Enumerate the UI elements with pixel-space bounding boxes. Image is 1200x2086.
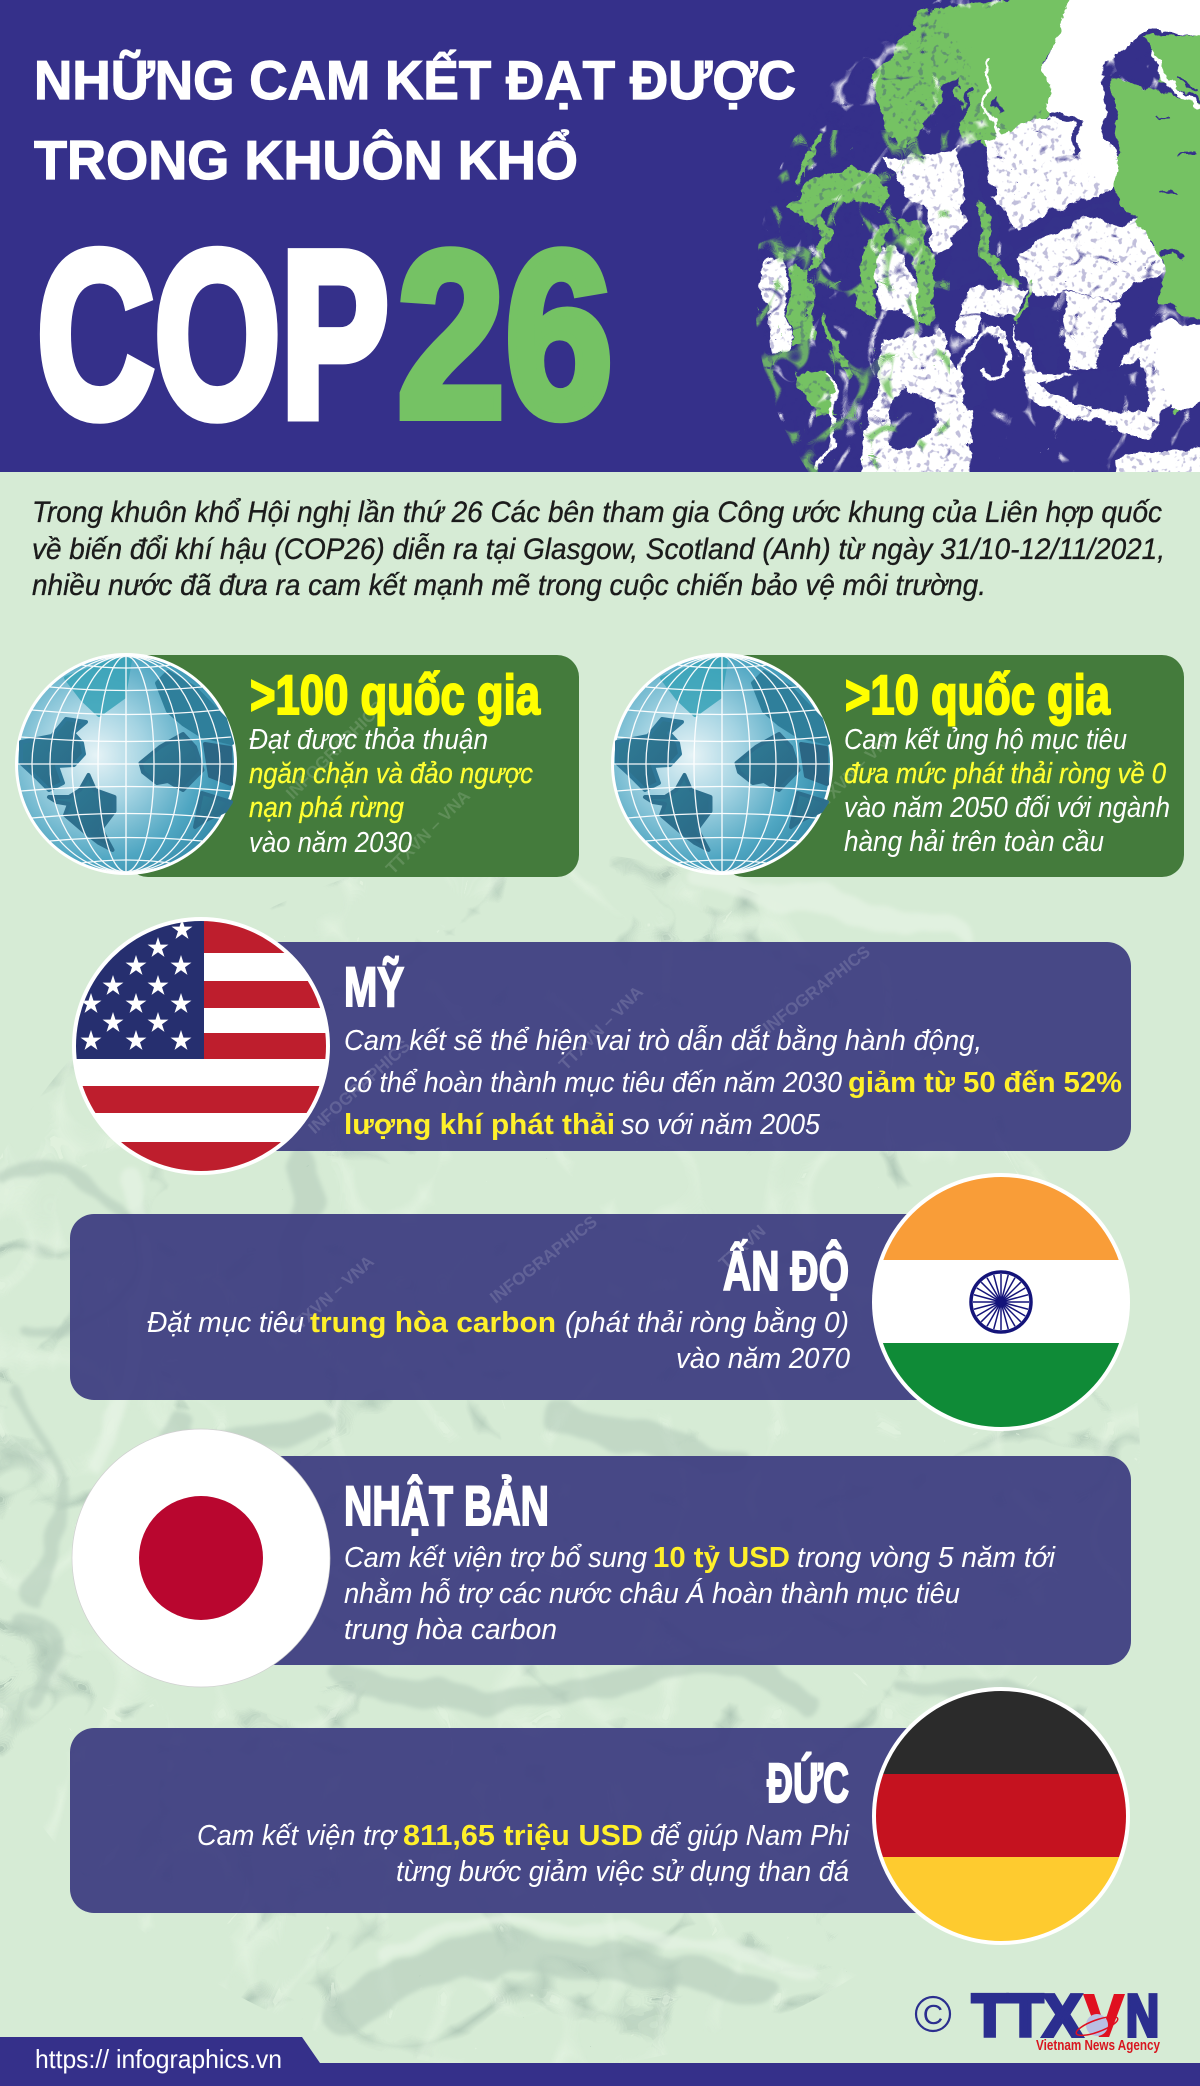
body text: nhằm hỗ trợ các nước châu Á hoàn thành mục tiêu: [344, 1577, 960, 1610]
body text: vào năm 2030: [249, 827, 412, 859]
body text: Đạt được thỏa thuận: [249, 724, 488, 756]
header band: [0, 0, 1200, 487]
body text: Cam kết viện trợ bổ sung: [344, 1542, 647, 1574]
panel: India: TTXVN: [715, 1221, 769, 1273]
body text: có thể hoàn thành mục tiêu đến năm 2030: [344, 1067, 842, 1099]
body text: trung hòa carbon: [310, 1307, 556, 1339]
body text: 811,65 triệu USD: [403, 1820, 643, 1852]
body text: [197, 1820, 850, 1888]
texture: vein overlays: [750, 0, 1200, 472]
body text: lượng khí phát thải: [344, 1109, 615, 1141]
icon: globe: [611, 653, 833, 875]
body text: [249, 724, 533, 859]
body text: 10 tỷ USD: [653, 1542, 790, 1574]
heading line 2: TRONG KHUÔN KHỔ: [34, 129, 578, 191]
body text: [147, 1306, 850, 1375]
icon: copyright: C: [923, 1999, 943, 2030]
footer bar: [0, 2037, 1200, 2086]
stat heading: >10 quốc gia: [845, 663, 1111, 726]
panel: India: INFOGRAPHICS: [486, 1212, 601, 1307]
body text: đưa mức phát thải ròng về 0: [844, 758, 1166, 790]
panel: United States: INFOGRAPHICS: [305, 1036, 414, 1138]
panel: more than 100 countries: INFOGRAPHICS: [282, 697, 388, 803]
icon: copyright: [916, 1997, 950, 2031]
solid green and white masses: [937, 0, 1200, 413]
intro paragraph: [32, 496, 1165, 602]
panel: United States: INFOGRAPHICS: [759, 942, 874, 1037]
body text: [344, 1542, 1057, 1646]
title: 26: 26: [397, 203, 613, 467]
body text: Cam kết viện trợ: [197, 1820, 398, 1852]
panel: more than 100 countries: [15, 653, 579, 878]
icon: globe: [15, 653, 237, 875]
body text: trung hòa carbon: [344, 1614, 557, 1646]
panel: India: [70, 1170, 1132, 1433]
intro paragraph: nhiều nước đã đưa ra cam kết mạnh mẽ trong cuộc chiến bảo vệ môi trường.: [32, 569, 986, 602]
panel: Germany: [70, 1685, 1132, 1947]
heading line 1: NHỮNG CAM KẾT ĐẠT ĐƯỢC: [34, 49, 796, 111]
icon: India flag: [870, 1170, 1132, 1433]
body text: để giúp Nam Phi: [650, 1820, 850, 1852]
body text: Cam kết ủng hộ mục tiêu: [844, 724, 1127, 756]
stat heading: >100 quốc gia: [250, 663, 541, 726]
logo: copyright and TTXVN: TTX: [972, 1983, 1082, 2049]
panel: Japan: [72, 1429, 1131, 1687]
country name: ẤN ĐỘ: [723, 1239, 849, 1302]
country name: NHẬT BẢN: [344, 1474, 549, 1537]
body text: so với năm 2005: [621, 1109, 821, 1141]
panel: more than 10 countries: [611, 653, 1184, 877]
body text: giảm từ 50 đến 52%: [848, 1067, 1122, 1099]
body text: ngăn chặn và đảo ngược: [249, 758, 533, 790]
logo: copyright and TTXVN: N: [1126, 1983, 1159, 2049]
logo: copyright and TTXVN: Vietnam News Agency: [1036, 2037, 1161, 2054]
panel: India: TTXVN – VNA: [283, 1252, 378, 1340]
panel: United States: TTXVN – VNA: [555, 982, 647, 1074]
body text: [344, 1024, 1122, 1141]
icon: Germany flag: [870, 1685, 1132, 1947]
logo: copyright and TTXVN: [916, 1983, 1161, 2054]
body text: Cam kết sẽ thể hiện vai trò dẫn dắt bằng hành động,: [344, 1024, 982, 1057]
body text: từng bước giảm việc sử dụng than đá: [396, 1856, 849, 1888]
body text: trong vòng 5 năm tới: [797, 1542, 1057, 1574]
title: COP: COP: [37, 203, 389, 467]
footer url: https:// infographics.vn: [35, 2044, 282, 2074]
country name: MỸ: [344, 955, 404, 1018]
body text: vào năm 2050 đối với ngành: [844, 792, 1170, 824]
logo: copyright and TTXVN: V: [1084, 1983, 1124, 2049]
icon: Japan flag: [72, 1429, 330, 1687]
body text: hàng hải trên toàn cầu: [844, 826, 1104, 858]
icon: US flag: [70, 917, 335, 1175]
country name: ĐỨC: [767, 1751, 849, 1814]
background: faint swirling earth: [0, 850, 1200, 2086]
body text: (phát thải ròng bằng 0): [565, 1306, 849, 1339]
body text: nạn phá rừng: [249, 792, 404, 824]
panel: more than 10 countries: TTXVN – VNA: [808, 725, 900, 817]
body text: vào năm 2070: [676, 1343, 850, 1375]
illustration: marbled earth: [750, 0, 1200, 487]
panel: more than 100 countries: TTXVN – VNA: [382, 786, 474, 878]
body text: [844, 724, 1170, 858]
panel: United States: [70, 917, 1131, 1175]
body text: Đặt mục tiêu: [147, 1307, 304, 1339]
